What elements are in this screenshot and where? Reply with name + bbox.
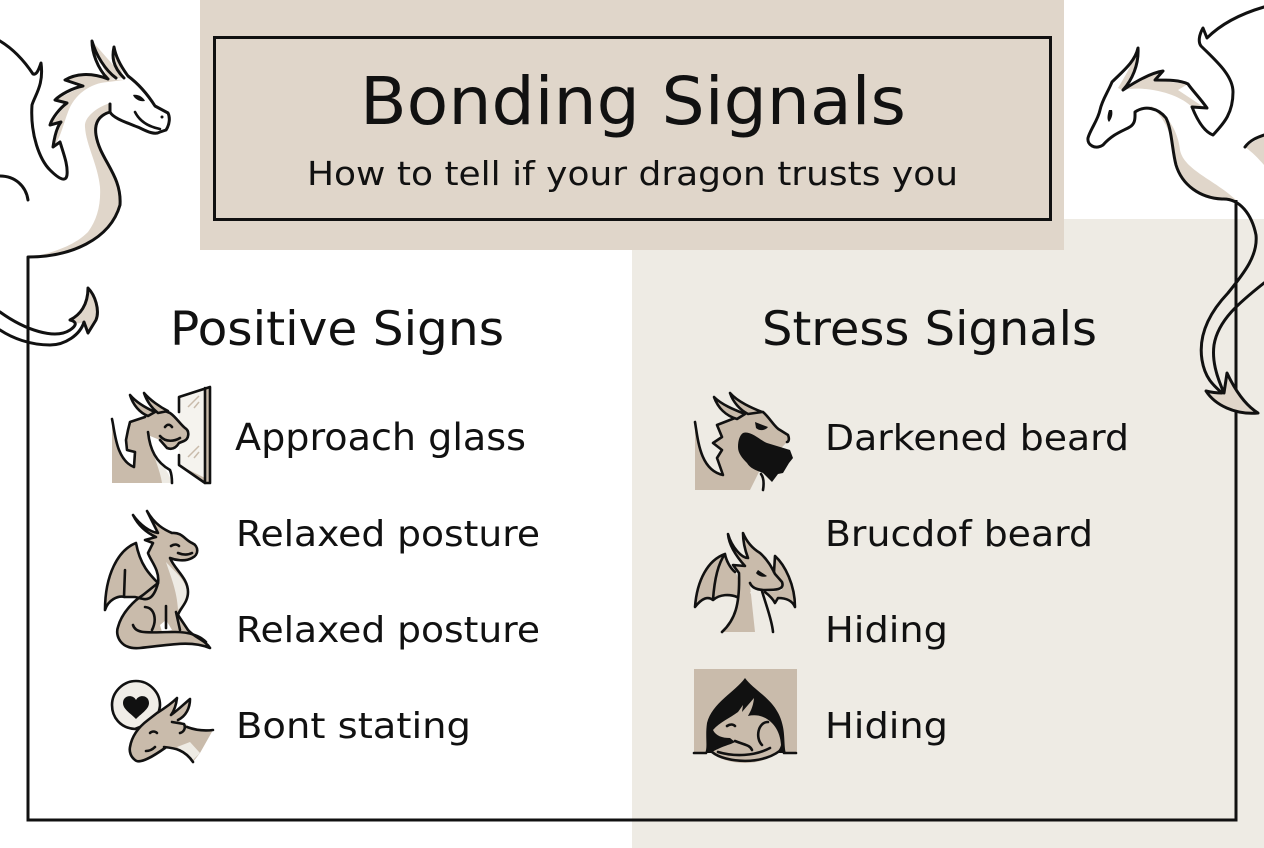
panel: title banner [200,0,1064,250]
label: darkened beard: Darkened beard [825,418,1129,459]
label: hiding (lower): Hiding [825,706,948,747]
label: relaxed posture (lower): Relaxed posture [236,610,540,651]
illustration: left dragon [0,41,169,345]
subtitle: How to tell if your dragon trusts you [307,154,958,193]
label: relaxed posture (upper): Relaxed posture [236,514,540,555]
content frame [28,200,1236,820]
icon: dragon with wings raised [695,533,795,632]
title: Bonding Signals [360,63,906,140]
icon: dragon approaching glass [112,387,211,483]
icon: dragon hiding in cave [694,669,797,763]
heading: stress signals: Stress Signals [762,302,1097,357]
label: hiding (upper): Hiding [825,610,948,651]
label: approach glass: Approach glass [235,416,526,459]
panel: positive signs [105,302,540,762]
icon: dragon with darkened beard [695,393,793,490]
heading: positive signs: Positive Signs [170,302,504,357]
icon: relaxed dragon [105,511,210,648]
icon: heart and dragon head [112,681,213,762]
panel: stress signals background [632,219,1264,848]
label: brucdof beard: Brucdof beard [825,514,1093,555]
panel: stress signals [694,302,1129,763]
illustration: right dragon [1088,7,1264,413]
label: bont stating: Bont stating [236,706,471,747]
